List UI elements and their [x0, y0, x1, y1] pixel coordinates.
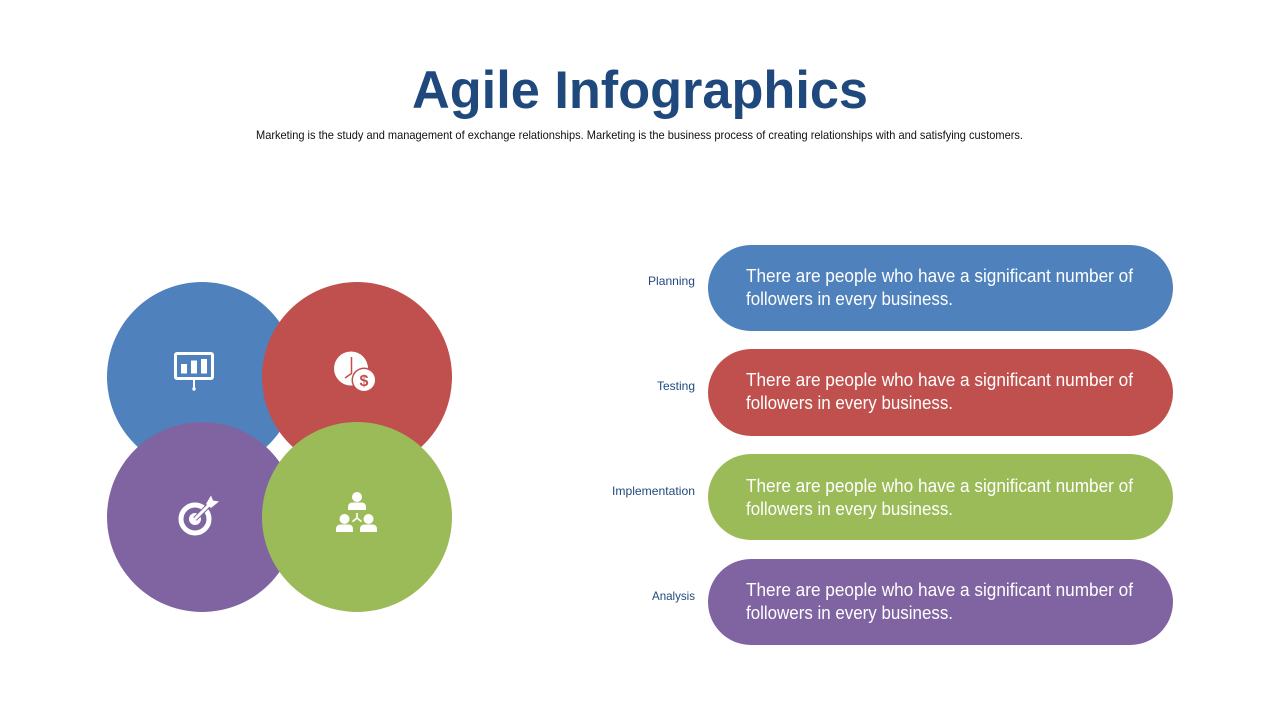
label: planning: Planning — [648, 274, 695, 288]
row: analysis — [652, 559, 1173, 645]
circle: planning — [107, 282, 297, 472]
row: planning — [648, 245, 1173, 331]
pill: testing — [708, 349, 1173, 436]
row: implementation — [612, 454, 1173, 540]
icon: clock and dollar — [334, 352, 376, 392]
text: planning description: followers in every business. — [746, 289, 953, 309]
label: testing: Testing — [657, 379, 695, 393]
text: implementation description: There are people who have a significant number of — [746, 476, 1134, 496]
circle: implementation — [262, 422, 452, 612]
icon: clock and dollar: $ — [360, 373, 369, 390]
circle: testing — [262, 282, 452, 472]
circle: analysis — [107, 422, 297, 612]
text: testing description: There are people who have a significant number of — [746, 370, 1134, 390]
pill: planning — [708, 245, 1173, 331]
text: implementation description: followers in every business. — [746, 499, 953, 519]
subtitle: Marketing is the study and management of exchange relationships. Marketing is the business process of creating relationships with and satisfying customers. — [256, 128, 1023, 142]
label: analysis: Analysis — [652, 589, 695, 603]
text: testing description: followers in every business. — [746, 393, 953, 413]
circle cluster — [107, 282, 452, 612]
label: implementation: Implementation — [612, 484, 695, 498]
icon: team hierarchy — [336, 492, 377, 532]
row: testing — [657, 349, 1173, 436]
text: analysis description: followers in every business. — [746, 603, 953, 623]
icon: presentation board — [176, 354, 212, 391]
pill: implementation — [708, 454, 1173, 540]
icon: target with dart — [181, 496, 219, 533]
text: planning description: There are people who have a significant number of — [746, 266, 1134, 286]
pill: analysis — [708, 559, 1173, 645]
text: analysis description: There are people who have a significant number of — [746, 580, 1134, 600]
title: Agile Infographics — [412, 61, 868, 120]
